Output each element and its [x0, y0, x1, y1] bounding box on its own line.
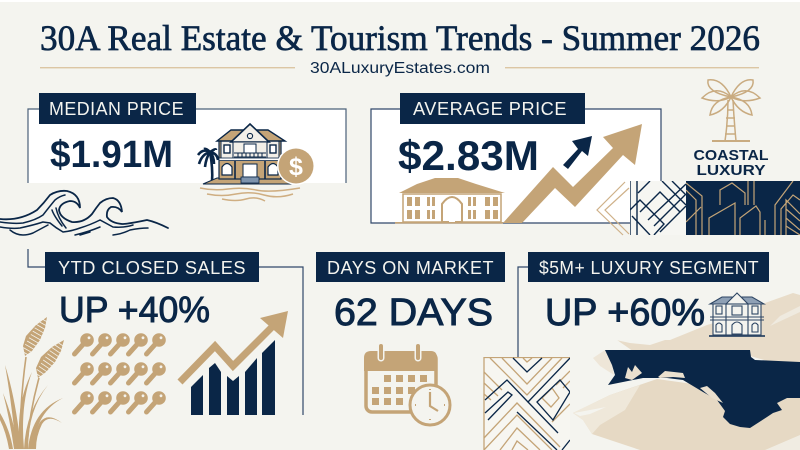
decorative geometric tile: [484, 357, 570, 450]
icon: palm tree: [702, 80, 760, 141]
icon: gold water ripples: [200, 188, 300, 201]
map: florida panhandle: [605, 350, 800, 428]
subtitle: website: 30ALuxuryEstates.com: [310, 60, 490, 77]
icon: small navy arrow: [563, 136, 592, 169]
map: coastal bays: [625, 365, 723, 403]
panel: average price: [371, 93, 661, 224]
icon: dollar coin: $: [289, 153, 303, 181]
value: ytd closed sales: UP +40%: [59, 289, 210, 330]
panel: $5M+ luxury segment: [518, 252, 769, 357]
heading: median price: MEDIAN PRICE: [49, 99, 184, 119]
heading: $5M+ luxury segment: $5M+ LUXURY SEGMENT: [539, 258, 759, 278]
panel: median price: [28, 93, 346, 185]
value: average price: $2.83M: [398, 132, 539, 179]
icon: large gold growth arrow: [503, 124, 642, 223]
decorative geometric band: [597, 181, 800, 235]
value: days on market: 62 DAYS: [334, 292, 493, 334]
text: coastal luxury: [694, 147, 768, 179]
text: coastal luxury: COASTAL: [694, 147, 768, 164]
text: coastal luxury: LUXURY: [696, 162, 766, 179]
heading: average price: AVERAGE PRICE: [413, 99, 567, 119]
title: 30A Real Estate & Tourism Trends - Summer 2026: [40, 18, 760, 58]
sand brush stroke: [573, 293, 800, 450]
icon: calendar with clock: [364, 346, 450, 425]
icon: gold mansion: [395, 178, 505, 224]
panel: ytd closed sales: [28, 249, 303, 415]
icon: small mansion: [709, 293, 765, 336]
heading: ytd closed sales: YTD CLOSED SALES: [58, 258, 246, 278]
icon: navy ocean waves: [0, 191, 168, 235]
icon: dollar coin: [277, 147, 315, 185]
panel: days on market: [316, 252, 505, 425]
value: median price: $1.91M: [50, 134, 173, 176]
icon: grid of keys: [74, 333, 166, 412]
value: $5M+ luxury segment: UP +60%: [545, 292, 705, 334]
heading: days on market: DAYS ON MARKET: [327, 258, 494, 278]
chart: rising bars with arrow: [180, 311, 288, 415]
icon: house with palm: [198, 124, 291, 184]
icon: wheat sea oats: [0, 317, 64, 449]
sand brush highlights: [574, 306, 800, 450]
